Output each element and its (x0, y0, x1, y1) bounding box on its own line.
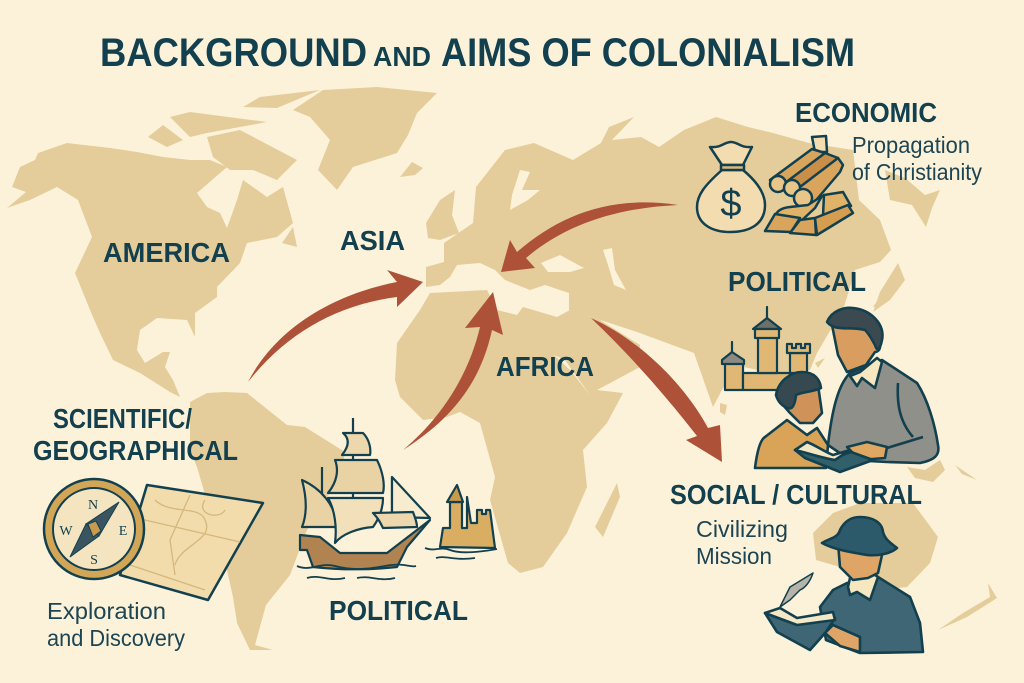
missionary body (820, 577, 923, 653)
title: BACKGROUND (100, 31, 367, 75)
teacher face (832, 325, 880, 372)
teacher torso (828, 360, 938, 463)
title: AIMS OF COLONIALISM (441, 31, 855, 75)
left sail (302, 480, 337, 527)
label: Asia: ASIA (340, 225, 405, 256)
text: Propagation of Christianity: of Christianity (852, 159, 982, 185)
text: Exploration and Discovery: and Discovery (47, 625, 185, 651)
main sail (328, 498, 383, 543)
missionary hat (822, 517, 897, 555)
map: Australia (813, 503, 938, 590)
teacher collar (850, 358, 882, 388)
boy body (755, 420, 828, 468)
map: Indonesian islands (907, 460, 977, 482)
missionary face (838, 543, 882, 580)
heading: Political (bottom): POLITICAL (329, 595, 468, 626)
middle sail (328, 460, 384, 493)
icon: compass: N (88, 498, 98, 513)
text: Propagation of Christianity (852, 132, 982, 185)
text: Exploration and Discovery: Exploration (47, 598, 166, 624)
icon: money bag (697, 142, 765, 232)
arrow: America to Europe (248, 270, 423, 382)
map: Eurasia (426, 117, 891, 407)
illustration: teacher and boy reading (755, 308, 938, 472)
map: North America (7, 143, 293, 402)
arrow: South Atlantic to Europe (403, 292, 503, 450)
waves (297, 565, 416, 579)
missionary collar (848, 570, 878, 600)
heading: Scientific / Geographical: GEOGRAPHICAL (33, 435, 238, 466)
map: inland seas (510, 170, 626, 395)
icon: compass: S (90, 553, 98, 568)
icon: castle (722, 307, 810, 390)
heading: Scientific / Geographical (33, 403, 238, 466)
icon: compass (44, 479, 144, 579)
boy face (783, 385, 822, 423)
fore sail (373, 512, 417, 528)
open book (765, 613, 835, 650)
jib (392, 477, 430, 518)
heading: Political (top): POLITICAL (728, 266, 866, 297)
title (100, 31, 855, 75)
heading: Scientific / Geographical: SCIENTIFIC/ (53, 403, 192, 434)
icon: map sheet (120, 485, 263, 600)
missionary hand (825, 625, 860, 652)
icon: compass: E (119, 524, 127, 539)
label: Africa: AFRICA (496, 351, 594, 382)
masts (322, 418, 392, 515)
heading: Economic: ECONOMIC (795, 97, 937, 128)
map: Japan (873, 263, 905, 312)
text: Propagation of Christianity: Propagation (852, 132, 970, 158)
icon: money bag: $ (720, 183, 742, 225)
icon: spice rolls and gold bars (765, 136, 853, 235)
arrow: Asia to Europe (501, 202, 678, 272)
illustration: missionary with book (765, 517, 923, 653)
map: Greenland (293, 87, 437, 190)
title: AND (373, 41, 431, 72)
teacher hair (827, 308, 882, 349)
text: Civilizing Mission (696, 516, 788, 569)
map: South America (190, 392, 345, 650)
text: Civilizing Mission: Mission (696, 543, 772, 569)
map: Newfoundland (282, 227, 297, 247)
map: Kamchatka (885, 170, 940, 227)
map: Africa and Arabia (395, 290, 640, 573)
teacher sleeve line (887, 383, 923, 448)
teacher hand (847, 442, 887, 460)
icon: coastal fort (425, 485, 497, 559)
map: New Zealand (938, 583, 997, 630)
label: America: AMERICA (103, 237, 230, 268)
top sail (342, 433, 370, 455)
icon: sailing ship (297, 418, 430, 579)
feather quill (780, 573, 813, 607)
heading: Social / Cultural: SOCIAL / CULTURAL (670, 479, 922, 510)
world map (7, 87, 997, 650)
text: Civilizing Mission: Civilizing (696, 516, 788, 542)
map: Britain and Ireland (426, 190, 459, 240)
map: Arctic islands (148, 90, 320, 180)
map: Iceland (400, 162, 423, 177)
map: Sumatra and Philippines (720, 293, 893, 415)
arrow: Middle East to South Asia (591, 318, 722, 462)
map: Madagascar (595, 483, 620, 537)
icon: compass: W (59, 524, 73, 539)
book (795, 450, 873, 472)
hull (300, 520, 430, 569)
text: Exploration and Discovery (47, 598, 185, 651)
boy hair (776, 372, 821, 408)
